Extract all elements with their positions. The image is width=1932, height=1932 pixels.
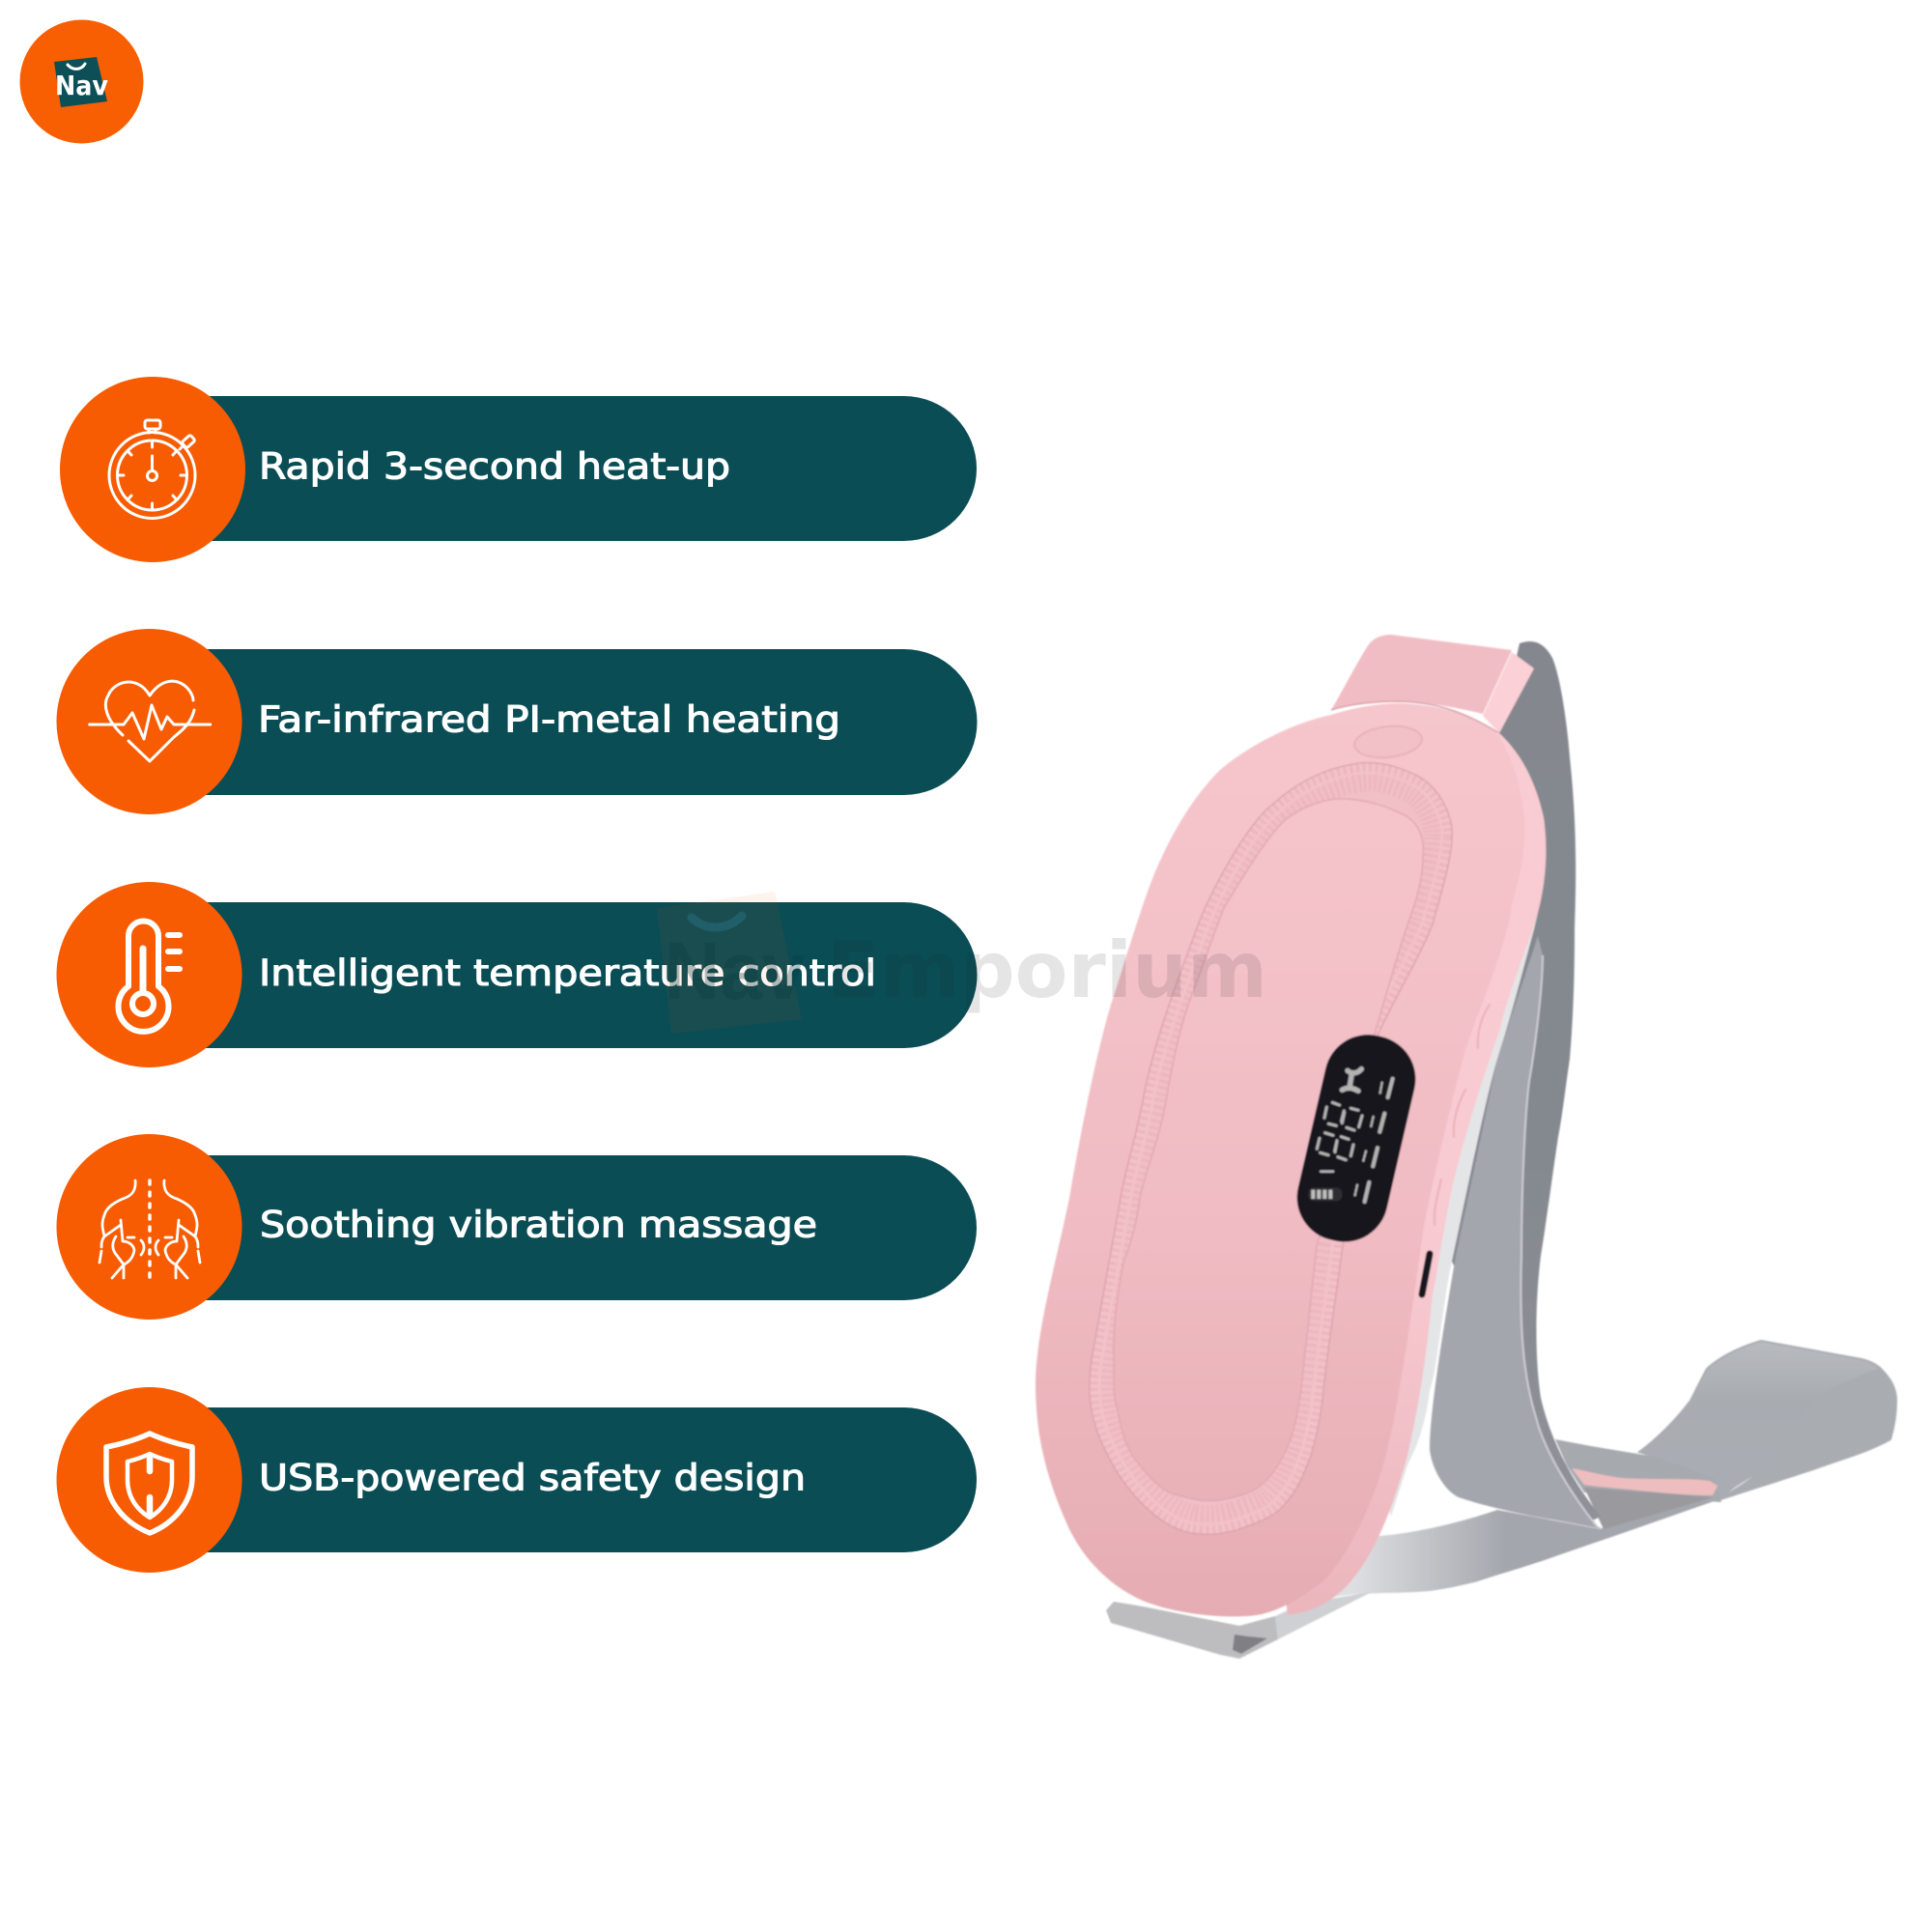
label: rapid heat-up: Rapid 3-second heat-up bbox=[259, 446, 730, 487]
top tab bbox=[1331, 635, 1512, 714]
watermark: Nav Emporium: Emporium bbox=[827, 925, 1267, 1015]
level bars bbox=[1365, 1079, 1393, 1202]
LCD display bbox=[1289, 1026, 1424, 1250]
feature row: rapid heat-up bbox=[60, 377, 977, 562]
pink rim bbox=[1256, 733, 1546, 1615]
feature row: temperature control bbox=[56, 882, 978, 1067]
front face bbox=[1036, 703, 1524, 1616]
strap loop bbox=[1639, 1341, 1881, 1500]
battery bbox=[1308, 1187, 1342, 1201]
strap loop inside bbox=[1718, 1369, 1896, 1500]
feature row: vibration massage bbox=[56, 1134, 977, 1320]
USB port bbox=[1422, 1254, 1430, 1294]
vibration icon bbox=[1342, 1069, 1361, 1091]
end tab of strap bbox=[1106, 1602, 1278, 1659]
seven-segment digits bbox=[1324, 1102, 1362, 1130]
buckle band bbox=[1555, 1439, 1721, 1502]
inner grey strap bbox=[1430, 936, 1604, 1529]
label: far-infrared heating: Far-infrared PI-metal heating bbox=[258, 699, 840, 740]
watermark: Nav Emporium bbox=[657, 892, 1267, 1034]
icon: thermometer bbox=[118, 922, 180, 1032]
product photo: heating massage belt bbox=[1036, 635, 1896, 1659]
foam backing bbox=[1372, 913, 1538, 1517]
power button bbox=[1353, 723, 1423, 761]
watermark: Nav Emporium: Nav bbox=[665, 925, 805, 1016]
logo: Nav badge: Nav bbox=[55, 70, 108, 101]
icon: stopwatch bbox=[109, 420, 195, 518]
label: USB safety design: USB-powered safety design bbox=[259, 1457, 806, 1499]
logo: Nav badge bbox=[19, 19, 143, 143]
long lower strap bbox=[1272, 1439, 1890, 1618]
outer dark strap bbox=[1449, 641, 1601, 1524]
feature row: USB safety design bbox=[56, 1387, 977, 1573]
label: vibration massage: Soothing vibration massage bbox=[260, 1204, 817, 1246]
icon: shield bbox=[106, 1434, 192, 1533]
pink buckle bbox=[1572, 1468, 1718, 1495]
icon: heart with pulse bbox=[90, 681, 211, 761]
feature row: far-infrared heating bbox=[56, 629, 978, 814]
small arrow bbox=[1321, 1168, 1333, 1176]
icon: back massage bbox=[99, 1180, 200, 1279]
stitched pad bbox=[1090, 763, 1452, 1534]
label: temperature control: Intelligent temperature control bbox=[259, 952, 876, 994]
side buttons bbox=[1435, 1005, 1490, 1225]
